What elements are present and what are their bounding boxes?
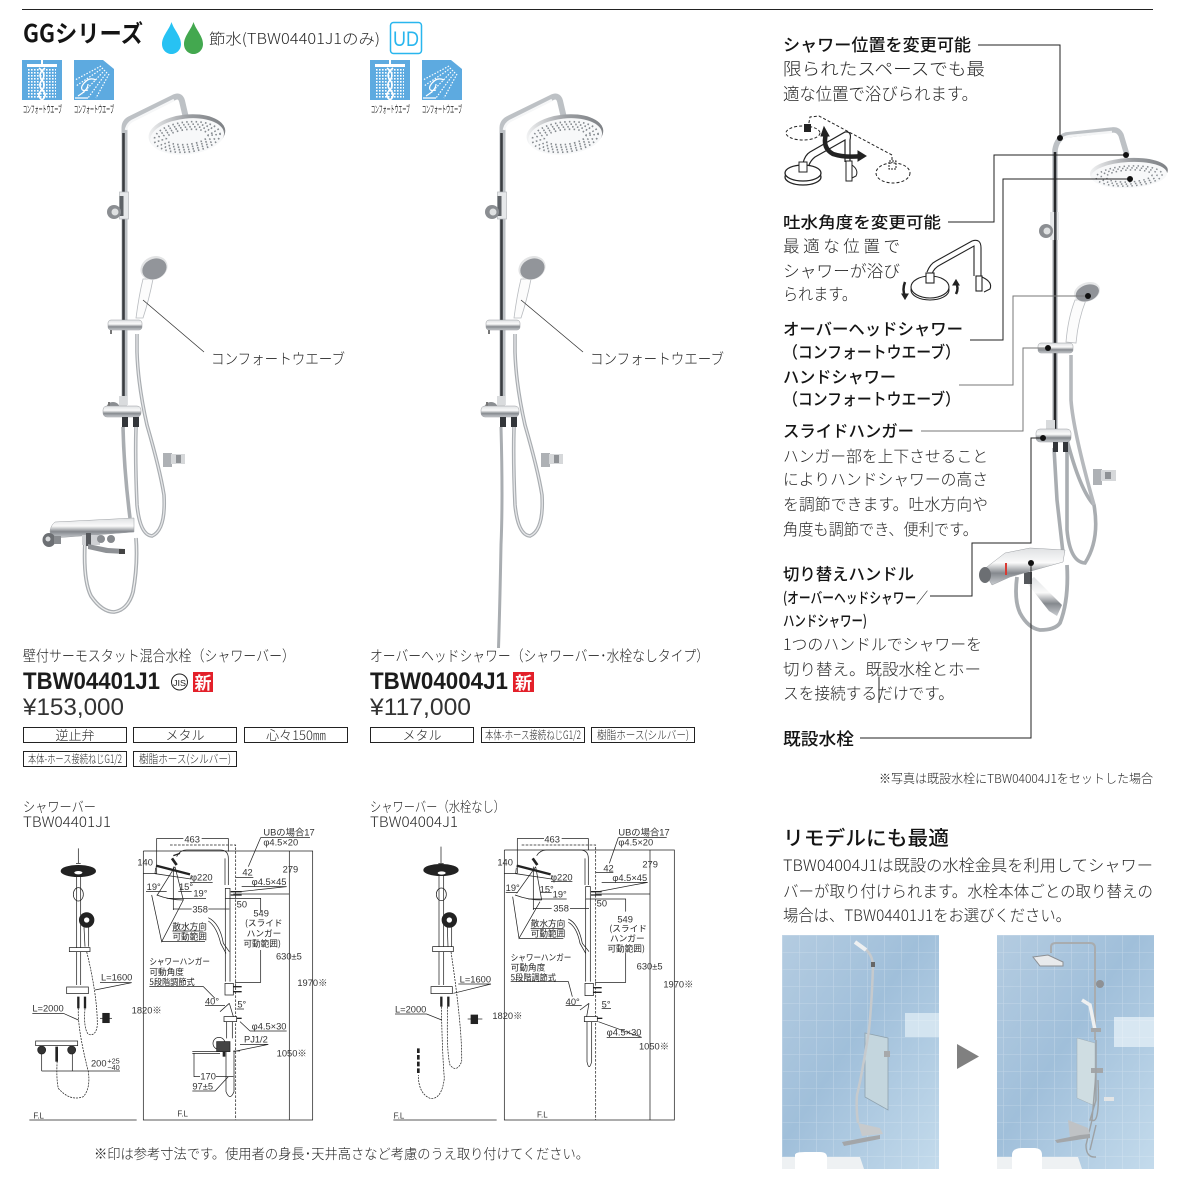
dimension drawing: TBW04004J1: UBの場合17: [618, 827, 670, 838]
icon set: comfort wave, product 1: コンフォートウエーブ: [23, 101, 62, 116]
dimension drawing: TBW04401J1: 50: [237, 900, 247, 910]
dimension drawing heading: TBW04401J1: シャワーバー: [23, 797, 96, 817]
side view: [504, 838, 674, 1120]
dimension drawing: TBW04401J1: 15°: [179, 882, 193, 892]
dimension drawing: TBW04401J1: PJ1/2: [244, 1034, 268, 1044]
dimension drawing: TBW04401J1: 97±5: [192, 1081, 213, 1091]
dimension drawing: TBW04401J1: 19°: [193, 889, 208, 899]
dimension drawing: TBW04004J1: 630±5: [637, 962, 663, 972]
product info: TBW04401J1: [22, 645, 295, 721]
dimension drawing: TBW04401J1: 358: [192, 904, 208, 914]
dimension drawing: TBW04401J1: 散水方向: [172, 920, 207, 932]
feature text: slide hanger: によりハンドシャワーの高さ: [783, 466, 988, 490]
dimension drawing: TBW04004J1: 散水方向: [531, 918, 565, 930]
remodel text: TBW04004J1は既設の水栓金具を利用してシャワー: [783, 852, 1153, 876]
text: コンフォートウエーブ: [422, 101, 462, 116]
dimension drawing: TBW04401J1: 279: [283, 864, 298, 874]
text: コンフォートウエーブ: [74, 101, 114, 116]
dimension drawing: TBW04004J1: ハンガー: [610, 933, 645, 945]
feature text: spray angle: られます。: [783, 281, 857, 305]
dimension drawing: TBW04004J1: L=1600: [460, 974, 491, 984]
water saving note: 節水(TBW04401J1のみ): [209, 28, 380, 49]
dimension drawing: TBW04401J1: 630±5: [276, 951, 302, 961]
dimension drawing: TBW04004J1: F.L: [394, 1111, 405, 1120]
remodel heading: リモデルにも最適: [783, 822, 949, 851]
dimension drawing: TBW04004J1: φ4.5×45: [612, 873, 647, 883]
feature text: switching handle: 1つのハンドルでシャワーを: [783, 631, 982, 655]
dimension drawing: TBW04004J1: 50: [597, 899, 607, 909]
dimension drawing heading: TBW04004J1: [370, 797, 505, 832]
feature text: overhead and hand shower: オーバーヘッドシャワー: [783, 316, 963, 340]
photo: before installation: [782, 935, 939, 1169]
feature text: slide hanger: [783, 418, 988, 540]
dimension drawing: TBW04004J1: 42: [603, 864, 614, 874]
feature tags: TBW04401J1: メタル: [165, 725, 205, 744]
dimension drawing: TBW04401J1: 19°: [147, 882, 161, 892]
dimension drawing: TBW04004J1: 可動範囲): [607, 943, 645, 955]
feature text: spray angle: シャワーが浴び: [783, 258, 901, 282]
dimension drawing: TBW04401J1: F.L: [177, 1110, 189, 1119]
feature text: overhead and hand shower: （コンフォートウエーブ）: [783, 339, 960, 363]
dimension drawing: TBW04004J1: 5°: [602, 999, 611, 1009]
front view: [393, 847, 497, 1120]
feature tags: TBW04004J1: 樹脂ホース(シルバー): [597, 727, 689, 743]
dimension drawing: TBW04004J1: 358: [553, 904, 569, 914]
remodel text: 場合は、TBW04401J1をお選びください。: [783, 902, 1071, 926]
dimension drawing: TBW04004J1: 可動範囲: [531, 928, 565, 940]
product info: TBW04401J1: JIS: [173, 678, 186, 688]
dimension drawing: TBW04401J1: F.L: [33, 1111, 45, 1120]
dimension drawing: TBW04401J1: φ4.5×20: [263, 838, 298, 848]
product photo: TBW04004J1 shower bar without faucet: [481, 97, 605, 648]
feature tags: TBW04401J1: 本体-ホース接続ねじG1/2: [28, 751, 122, 767]
dimension drawing: TBW04401J1: (スライド: [245, 917, 283, 929]
dimension drawing: TBW04401J1: 1970※: [297, 978, 327, 988]
arrow: before to after: [957, 1044, 979, 1069]
dimension drawing: TBW04004J1: φ4.5×30: [607, 1028, 642, 1038]
dimension drawing: TBW04004J1: 1050※: [639, 1042, 669, 1052]
icon set: comfort wave, product 1: [22, 60, 114, 116]
dimension drawing: TBW04004J1: 549: [617, 914, 633, 924]
dimension drawing heading: TBW04004J1: TBW04004J1: [370, 812, 458, 832]
dimension drawing: TBW04401J1: 1820※: [132, 1005, 162, 1015]
feature text: spray angle: 最適な位置で: [783, 233, 900, 257]
photo: after installation: [997, 935, 1154, 1169]
product photo: installed shower on existing faucet: [979, 130, 1169, 630]
icon set: comfort wave, product 2: コンフォートウエーブ: [371, 101, 410, 116]
product info: TBW04401J1: 壁付サーモスタット混合水栓（シャワーバー）: [23, 645, 295, 666]
feature text: slide hanger: 角度も調節でき、便利です。: [783, 516, 978, 540]
dimension drawing: TBW04401J1: 可動範囲): [243, 938, 281, 950]
dimension drawing: TBW04004J1: L=2000: [395, 1005, 426, 1015]
feature text: shower position: 適な位置で浴びられます。: [783, 80, 978, 105]
dimension drawing: TBW04004J1: 279: [642, 860, 658, 870]
feature text: switching handle: スを接続するだけです。: [783, 680, 954, 704]
dimension drawing: TBW04004J1: シャワーハンガー: [511, 951, 571, 963]
footnote: reference dimensions: ※印は参考寸法です。使用者の身長･天井高さなど考慮のうえ取り付けてください。: [94, 1144, 589, 1164]
product info: TBW04004J1: TBW04004J1: [370, 668, 508, 695]
dimension drawing: TBW04004J1: 1970※: [663, 980, 693, 990]
feature tags: TBW04004J1: [370, 725, 694, 744]
feature text: slide hanger: を調節できます。吐水方向や: [783, 491, 988, 515]
feature tags: TBW04401J1: 逆止弁: [55, 725, 95, 744]
feature tags: TBW04401J1: [24, 725, 348, 767]
dimension drawing: TBW04401J1: φ4.5×30: [252, 1021, 287, 1031]
dimension drawing: TBW04401J1: L=2000: [32, 1004, 64, 1014]
dimension drawing: TBW04004J1: 19°: [553, 890, 567, 900]
product info: TBW04401J1: TBW04401J1: [23, 668, 160, 695]
feature text: switching handle: [783, 561, 982, 704]
dimension drawing: TBW04401J1: −40: [107, 1063, 120, 1072]
dimension drawing: TBW04401J1: φ220: [191, 873, 213, 883]
icon: spray angle adjustment: [902, 240, 991, 300]
dimension drawing heading: TBW04004J1: シャワーバー（水栓なし）: [370, 797, 505, 817]
feature text: slide hanger: スライドハンガー: [783, 418, 914, 442]
feature text: switching handle: ハンドシャワー): [783, 610, 867, 631]
feature tags: TBW04401J1: 心々150㎜: [266, 725, 326, 744]
dimension drawing: TBW04401J1: 5段階調節式: [149, 976, 195, 988]
icon: universal design: [390, 22, 422, 54]
feature text: switching handle: 切り替え。既設水栓とホー: [783, 656, 981, 680]
side view: [143, 838, 313, 1120]
dimension drawing: TBW04004J1: 463: [544, 835, 560, 845]
dimension drawing: TBW04401J1: 549: [253, 909, 269, 919]
dimension drawing: TBW04401J1: UBの場合17: [263, 827, 315, 838]
icon: water saving drops: [162, 22, 203, 54]
icon set: comfort wave, product 2: [370, 60, 462, 116]
dimension drawing: TBW04004J1: [393, 827, 693, 1120]
dimension drawing: TBW04401J1: シャワーハンガー: [149, 955, 210, 967]
product photo: TBW04401J1 shower bar with faucet: [42, 97, 227, 612]
product info: TBW04004J1: ¥117,000: [369, 694, 471, 721]
remodel text: [783, 852, 1153, 926]
feature text: overhead and hand shower: [783, 316, 963, 410]
dimension drawing: TBW04401J1: 140: [137, 858, 153, 868]
dimension drawing: TBW04004J1: φ220: [551, 873, 573, 883]
feature text: spray angle: [783, 209, 941, 305]
icon: universal design: UD: [393, 28, 419, 51]
dimension drawing: TBW04004J1: (スライド: [609, 923, 647, 935]
dimension drawing: TBW04004J1: φ4.5×20: [618, 838, 653, 848]
feature text: overhead and hand shower: （コンフォートウエーブ）: [783, 386, 960, 410]
series heading: GGシリーズ: [23, 14, 143, 49]
dimension drawing: TBW04401J1: 42: [242, 868, 253, 878]
feature text: shower position: [783, 31, 985, 105]
dimension drawing: TBW04004J1: F.L: [537, 1110, 548, 1119]
callout: comfort wave, product 1: [143, 300, 345, 369]
dimension drawing: TBW04401J1: 5°: [237, 999, 247, 1009]
feature text: shower position: 限られたスペースでも最: [783, 55, 985, 80]
dimension drawing: TBW04401J1: 可動角度: [149, 966, 184, 978]
feature text: spray angle: 吐水角度を変更可能: [783, 209, 941, 233]
feature text: slide hanger: ハンガー部を上下させること: [783, 443, 988, 467]
dimension drawing heading: TBW04401J1: [23, 797, 111, 832]
leader lines for feature callouts: [860, 45, 1133, 738]
dimension drawing: TBW04401J1: L=1600: [101, 973, 132, 983]
product info: TBW04004J1: [369, 645, 709, 721]
callout: comfort wave, product 2: コンフォートウエーブ: [590, 348, 724, 369]
product info: TBW04401J1: 新: [194, 669, 212, 694]
dimension drawing: TBW04401J1: 可動範囲: [172, 930, 207, 942]
dimension drawing: TBW04004J1: 19°: [506, 883, 520, 893]
feature text: switching handle: (オーバーヘッドシャワー／: [783, 587, 928, 608]
dimension drawing: TBW04004J1: 15°: [540, 884, 554, 894]
feature text: shower position: シャワー位置を変更可能: [783, 31, 971, 56]
dimension drawing: TBW04401J1: +25: [107, 1056, 120, 1065]
dimension drawing: TBW04401J1: 200: [91, 1059, 107, 1069]
dimension drawing heading: TBW04401J1: TBW04401J1: [23, 812, 111, 832]
product info: TBW04004J1: オーバーヘッドシャワー（シャワーバー･水栓なしタイプ）: [370, 645, 709, 666]
dimension drawing: TBW04004J1: 40°: [566, 997, 580, 1007]
feature tags: TBW04401J1: 樹脂ホース(シルバー): [139, 751, 231, 767]
product info: TBW04401J1: ¥153,000: [22, 694, 124, 721]
callout: comfort wave, product 2: [521, 300, 724, 369]
dimension drawing: TBW04004J1: 5段階調節式: [511, 972, 556, 984]
dimension drawing: TBW04004J1: 140: [497, 858, 513, 868]
remodel text: バーが取り付けられます。水栓本体ごとの取り替えの: [783, 878, 1153, 902]
product info: TBW04004J1: 新: [515, 669, 532, 694]
dimension drawing: TBW04401J1: 463: [184, 835, 200, 845]
icon: shower arm rotation: [785, 116, 910, 185]
dimension drawing: TBW04401J1: ハンガー: [247, 928, 281, 940]
feature tags: TBW04004J1: メタル: [402, 725, 442, 744]
dimension drawing: TBW04401J1: 1050※: [277, 1049, 307, 1059]
dimension drawing: TBW04004J1: 可動角度: [511, 962, 546, 974]
front view: [29, 848, 137, 1120]
dimension drawing: TBW04004J1: 1820※: [492, 1011, 522, 1021]
feature text: switching handle: 切り替えハンドル: [783, 561, 914, 585]
dimension drawing: TBW04401J1: [29, 827, 327, 1120]
top rule: [22, 8, 1153, 10]
dimension drawing: TBW04401J1: 40°: [205, 996, 219, 1006]
feature text: overhead and hand shower: ハンドシャワー: [783, 364, 896, 388]
dimension drawing: TBW04401J1: 170: [200, 1071, 216, 1081]
photo note: ※写真は既設水栓にTBW04004J1をセットした場合: [879, 768, 1153, 787]
feature tags: TBW04004J1: 本体-ホース接続ねじG1/2: [485, 727, 581, 743]
dimension drawing: TBW04401J1: φ4.5×45: [252, 877, 287, 887]
feature label: existing faucet: 既設水栓: [783, 725, 854, 750]
callout: comfort wave, product 1: コンフォートウエーブ: [211, 348, 345, 369]
